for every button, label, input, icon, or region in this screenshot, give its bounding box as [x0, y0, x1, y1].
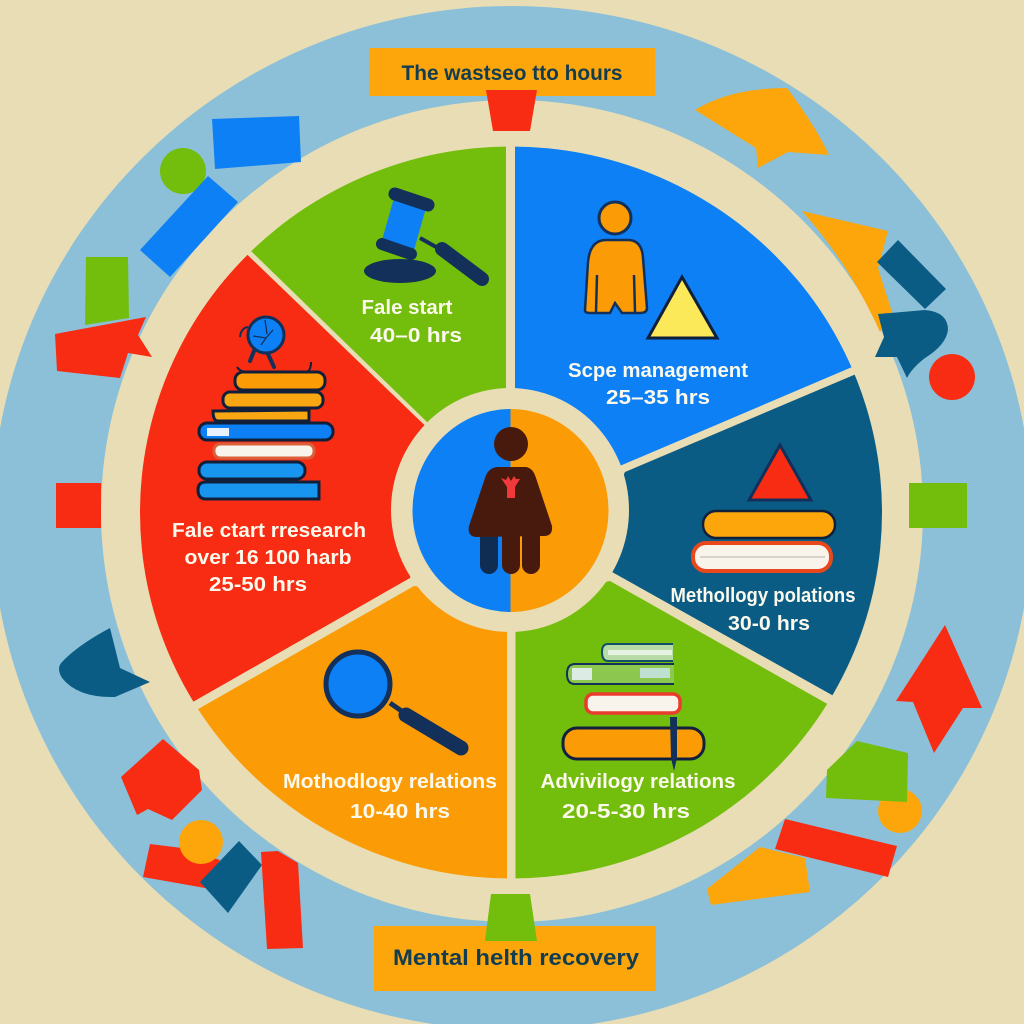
text: false start research: 25-50 hrs	[209, 574, 307, 596]
decorative shapes: top right	[695, 88, 975, 528]
text: methodology relations right	[670, 585, 856, 635]
text: scope management	[568, 360, 748, 409]
icon: green connector	[485, 894, 537, 941]
center beige circle	[391, 388, 629, 632]
decorative shapes: bottom left	[121, 739, 303, 949]
icon: books and pen	[563, 644, 704, 771]
text: false start: Fale start	[362, 297, 453, 319]
panel: green top sector	[251, 146, 506, 422]
text: false start	[362, 297, 462, 347]
text: advisory relations: Advivilogy relations	[540, 771, 736, 793]
text: methodology relations bottom	[283, 771, 497, 823]
icon: clock	[240, 317, 284, 367]
text: advisory relations	[540, 771, 736, 823]
panel: orange sector	[198, 586, 507, 878]
panel: blue sector	[515, 146, 852, 466]
text: methodology relations right: 30-0 hrs	[728, 613, 810, 635]
icon: triangle on books	[693, 445, 835, 571]
icon: red trapezoid connector	[486, 90, 537, 131]
banner: top title	[369, 48, 655, 96]
panel: red sector	[140, 255, 424, 702]
text: methodology relations right: Methollogy polations	[670, 585, 856, 607]
text: false start research: over 16 100 harb	[184, 547, 352, 569]
banner: bottom label	[374, 926, 656, 991]
text: false start research: Fale ctart rresearch	[172, 520, 366, 542]
banner: top title: The wastseo tto hours	[402, 62, 622, 85]
panel: green bottom sector	[516, 581, 828, 878]
panel: pie chart	[140, 146, 882, 878]
banner: bottom label: Mental helth recovery	[393, 945, 640, 970]
text: false start research	[172, 520, 366, 596]
icon: magnifying glass	[326, 652, 461, 748]
text: methodology relations bottom: Mothodlogy relations	[283, 771, 497, 793]
panel: navy sector	[612, 374, 882, 696]
text: methodology relations bottom: 10-40 hrs	[350, 801, 450, 823]
text: scope management: 25–35 hrs	[606, 387, 710, 409]
text: advisory relations: 20-5-30 hrs	[562, 801, 690, 823]
decorative shapes: top left	[55, 116, 301, 697]
decorative shapes: bottom right	[707, 625, 982, 905]
icon: book stack	[198, 362, 333, 499]
text: scope management: Scpe management	[568, 360, 748, 382]
icon: person with triangle	[585, 202, 717, 338]
text: false start: 40–0 hrs	[370, 325, 462, 347]
beige ring	[101, 100, 923, 922]
center figure disc	[412, 409, 608, 612]
icon: person in center	[469, 427, 552, 574]
icon: gavel	[364, 194, 482, 283]
